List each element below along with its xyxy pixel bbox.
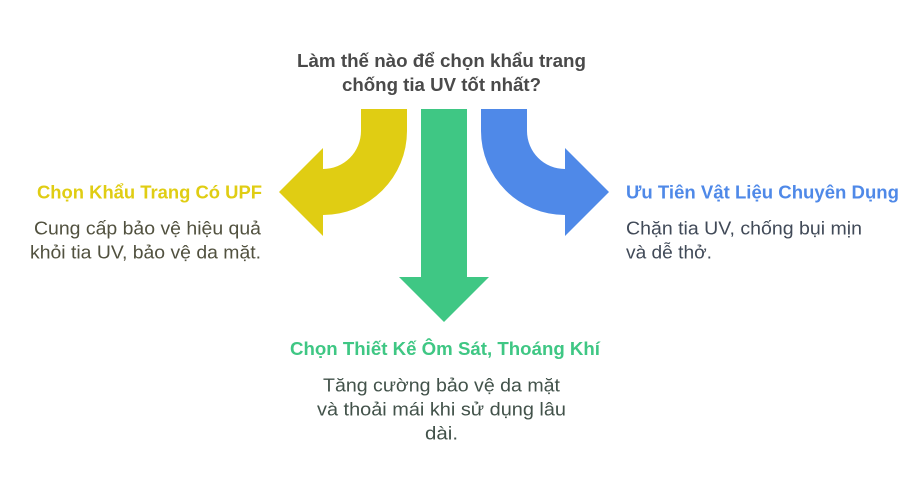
text block: bottom option: và thoải mái khi sử dụng lâu [317,398,566,420]
text block: bottom option: Tăng cường bảo vệ da mặt [323,374,560,396]
title [297,51,586,95]
panel: left option [30,182,262,262]
panel: bottom option [290,338,601,444]
heading: right option: Ưu Tiên Vật Liệu Chuyên Dụng [626,182,899,202]
title: chống tia UV tốt nhất? [342,75,541,95]
text block: bottom option [317,374,566,444]
text block: right option [626,218,862,262]
text block: right option: Chặn tia UV, chống bụi mịn [626,218,862,238]
text block: left option: khỏi tia UV, bảo vệ da mặt. [30,242,261,262]
heading: bottom option: Chọn Thiết Kế Ôm Sát, Thoáng Khí [290,338,601,359]
text block: left option [30,218,262,262]
text block: right option: và dễ thở. [626,242,712,262]
text block: bottom option: dài. [425,422,458,444]
arrow: blue curved right [481,109,609,236]
heading: left option: Chọn Khẩu Trang Có UPF [37,182,262,202]
title: Làm thế nào để chọn khẩu trang [297,51,586,71]
arrow: green straight down [399,109,489,322]
arrow: yellow curved left [279,109,407,236]
text block: left option: Cung cấp bảo vệ hiệu quả [34,218,262,238]
panel: right option [626,182,899,262]
